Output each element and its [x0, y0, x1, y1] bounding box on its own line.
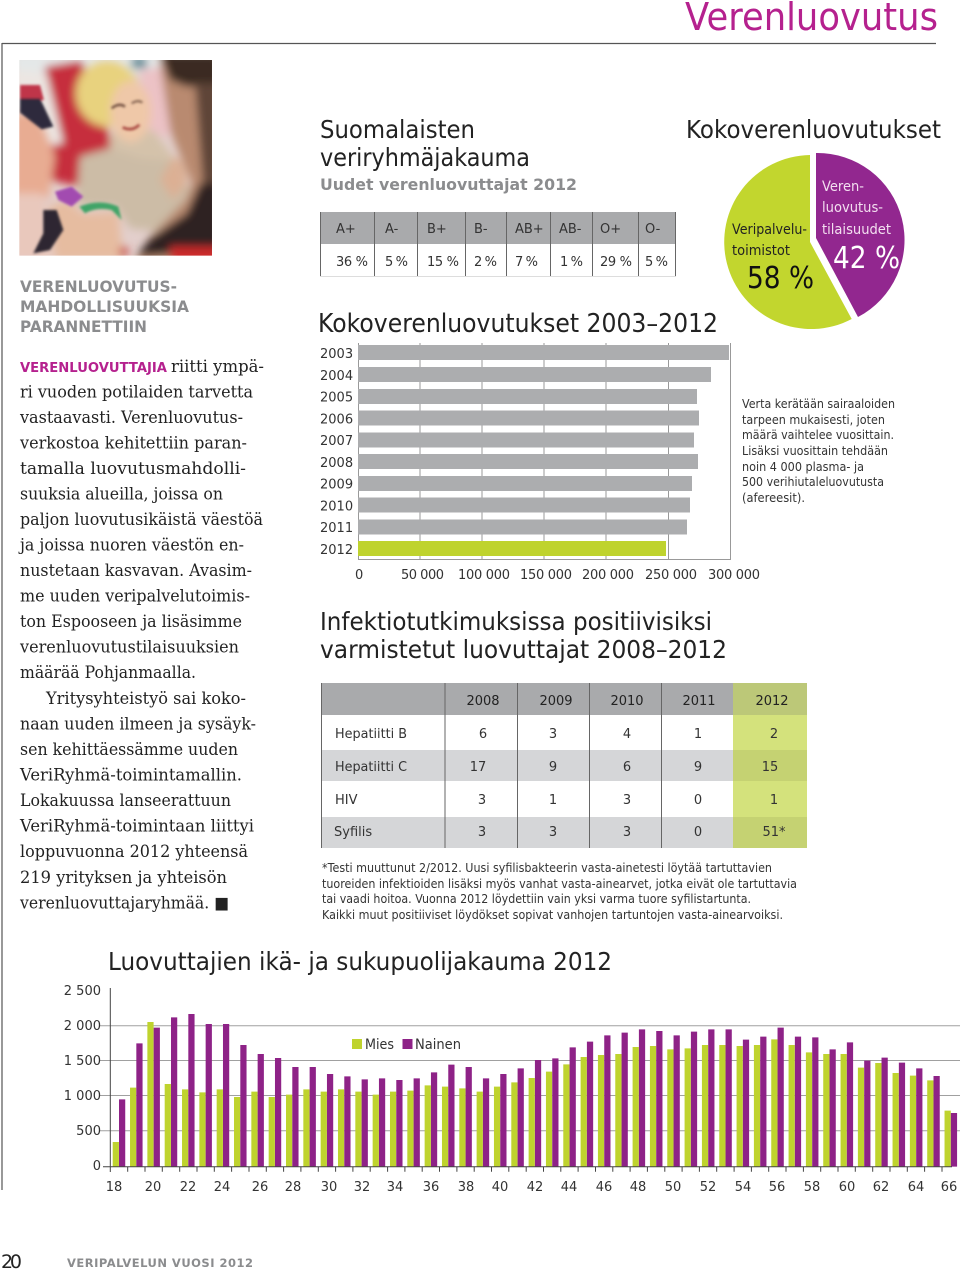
x axis labels: 64 — [908, 1180, 924, 1195]
y axis labels: 1 000 — [64, 1089, 101, 1104]
pie chart — [724, 153, 905, 329]
infection heading: Infektiotutkimuksissa positiivisiksi — [320, 607, 712, 636]
pie chart: toimistot — [732, 243, 790, 259]
bar chart heading: Kokoverenluovutukset 2003–2012 — [318, 309, 718, 339]
blood group heading: Suomalaisten — [320, 115, 475, 144]
side note: Lisäksi vuosittain tehdään — [742, 444, 888, 458]
infection table: 2009 — [539, 694, 573, 709]
legend — [352, 1037, 461, 1053]
footnote — [322, 861, 797, 922]
footer: VERIPALVELUN VUOSI 2012 — [67, 1256, 253, 1270]
bar chart: donations by year: 100 000 — [458, 568, 510, 583]
x axis labels: 20 — [145, 1180, 161, 1195]
x axis labels: 42 — [527, 1180, 543, 1195]
side note — [742, 397, 895, 505]
x axis labels: 44 — [561, 1180, 577, 1195]
blood group table: 36 % — [336, 255, 368, 270]
body text: ja joissa nuoren väestön en- — [18, 536, 244, 554]
infection table: 2011 — [682, 694, 716, 709]
photo: blood donor — [19, 60, 212, 256]
men bars — [113, 1022, 951, 1167]
infection table: Hepatiitti C — [335, 760, 407, 775]
body text: verenluovutustilaisuuksien — [19, 638, 239, 656]
x axis labels: 36 — [423, 1180, 439, 1195]
bar chart: donations by year: 50 000 — [401, 568, 444, 583]
body text: Lokakuussa lanseerattuun — [20, 791, 231, 810]
side note: noin 4 000 plasma- ja — [742, 460, 864, 474]
body text: sen kehittäessämme uuden — [20, 740, 238, 759]
x axis labels: 22 — [180, 1180, 196, 1195]
body text: määrää Pohjanmaalla. — [20, 663, 196, 682]
body text: nustetaan kasvavan. Avasim- — [20, 561, 252, 580]
bar chart: donations by year: 2007 — [320, 434, 353, 449]
body text: loppuvuonna 2012 yhteensä — [20, 842, 248, 861]
age chart heading: Luovuttajien ikä- ja sukupuolijakauma 2012 — [108, 947, 612, 976]
bar chart: donations by year: 150 000 — [520, 568, 572, 583]
bar chart: donations by year: 2012 — [320, 543, 353, 558]
infection table: 9 — [549, 760, 557, 775]
left heading: PARANNETTIIN — [20, 317, 147, 336]
x axis labels: 62 — [873, 1180, 889, 1195]
body text: ton Espooseen ja lisäsimme — [20, 612, 242, 631]
side note: tarpeen mukaisesti, joten — [742, 413, 885, 427]
body text: me uuden veripalvelutoimis- — [20, 586, 250, 606]
infection table: 1 — [549, 793, 557, 808]
footer — [1, 1251, 253, 1270]
x axis labels: 54 — [735, 1180, 751, 1195]
infection table: Syfilis — [334, 825, 372, 840]
body text: Yritysyhteistyö sai koko- — [45, 689, 246, 708]
infection table: 0 — [694, 825, 702, 840]
body text: 219 yrityksen ja yhteisön — [20, 868, 227, 887]
pie chart: Veripalvelu- — [732, 222, 807, 238]
blood group heading — [320, 115, 577, 194]
x axis labels: 50 — [665, 1180, 681, 1195]
x axis labels: 30 — [321, 1180, 337, 1195]
bar chart: donations by year: 2006 — [320, 412, 353, 428]
left heading: VERENLUOVUTUS- — [20, 277, 177, 296]
infection table: Hepatiitti B — [335, 727, 407, 742]
blood group heading: Uudet verenluovuttajat 2012 — [320, 175, 577, 194]
x axis labels: 32 — [354, 1180, 370, 1195]
y axis labels — [64, 984, 101, 1174]
bar chart: donations by year: 250 000 — [645, 568, 697, 583]
side note: määrä vaihtelee vuosittain. — [742, 428, 894, 442]
body text: riitti ympä- — [171, 357, 264, 376]
axes — [103, 988, 952, 1172]
bar chart: donations by year: 2011 — [320, 521, 353, 536]
footnote: *Testi muuttunut 2/2012. Uusi syfilisbakteerin vasta-ainetesti löytää tartuttavien — [322, 861, 772, 875]
infection heading — [320, 607, 727, 664]
footnote: tai vaadi hoitoa. Vuonna 2012 löydettiin vain yksi varma tuore syfilistartunta. — [322, 892, 751, 906]
y axis labels: 1 500 — [64, 1054, 101, 1069]
infection heading: varmistetut luovuttajat 2008–2012 — [320, 635, 727, 664]
infection table: 0 — [694, 793, 702, 808]
bar chart: donations by year: 2005 — [320, 390, 353, 406]
x axis labels — [106, 1180, 957, 1195]
blood group table: O+ — [600, 222, 621, 237]
infection table: 4 — [623, 727, 631, 742]
blood group table: 5 % — [645, 255, 668, 270]
bar chart: donations by year: 2010 — [320, 500, 353, 514]
body text: suuksia alueilla, joissa on — [20, 484, 223, 504]
legend: Mies — [365, 1037, 394, 1053]
x axis labels: 34 — [387, 1180, 403, 1195]
x axis labels: 48 — [630, 1180, 646, 1195]
infection table: 2008 — [466, 694, 500, 709]
body text: naan uuden ilmeen ja sysäyk- — [20, 714, 256, 734]
body text — [18, 357, 264, 912]
y axis labels: 2 000 — [64, 1019, 101, 1034]
infection table: 3 — [623, 793, 631, 808]
blood group heading: veriryhmäjakauma — [320, 143, 530, 172]
blood group table: 29 % — [600, 255, 632, 270]
infection table: 15 — [762, 760, 778, 775]
infection table: 1 — [770, 793, 778, 808]
y axis labels: 2 500 — [64, 984, 101, 999]
infection table: 3 — [478, 793, 486, 808]
body text: vastaavasti. Verenluovutus- — [19, 408, 243, 427]
bar chart: donations by year: 0 — [355, 568, 363, 583]
blood group table: 5 % — [385, 255, 408, 270]
pie chart: 42 % — [833, 241, 900, 276]
legend: Nainen — [415, 1037, 461, 1053]
x axis labels: 40 — [492, 1180, 508, 1195]
bar chart: donations by year — [320, 343, 760, 583]
blood group table: A- — [385, 222, 399, 237]
pie chart: 58 % — [747, 261, 814, 296]
infection table: 3 — [549, 727, 557, 742]
x axis labels: 28 — [285, 1180, 301, 1195]
infection table: 17 — [470, 760, 486, 775]
infection table — [321, 683, 807, 848]
infection table: 6 — [623, 760, 631, 775]
blood group table — [320, 212, 676, 276]
blood group table: 7 % — [515, 255, 538, 270]
blood group table: AB- — [559, 222, 582, 237]
body text: verkostoa kehitettiin paran- — [19, 434, 247, 452]
blood group table: O- — [645, 222, 661, 237]
body text: paljon luovutusikäistä väestöä — [20, 510, 263, 529]
infection table: 6 — [479, 727, 487, 742]
bar chart: donations by year: 300 000 — [708, 568, 760, 583]
x axis labels: 26 — [252, 1180, 268, 1195]
infection table: HIV — [335, 793, 358, 808]
bar chart: donations by year: 2003 — [320, 347, 353, 362]
bar chart: donations by year: 2008 — [320, 456, 353, 471]
infection table: 1 — [694, 727, 702, 742]
blood group table: 1 % — [560, 255, 583, 270]
x axis labels: 56 — [769, 1180, 785, 1195]
pie heading: Kokoverenluovutukset — [686, 115, 941, 144]
age and gender bar chart — [64, 984, 960, 1195]
x axis labels: 24 — [214, 1180, 230, 1195]
x axis labels: 66 — [941, 1180, 957, 1195]
side note: Verta kerätään sairaaloiden — [742, 397, 895, 411]
footnote: Kaikki muut positiiviset löydökset sopivat vanhojen tartuntojen vasta-ainearvoiksi. — [322, 908, 783, 922]
pie chart: tilaisuudet — [822, 222, 891, 238]
infection table: 2010 — [610, 694, 644, 709]
body text: VERENLUOVUTTAJIA — [20, 360, 168, 376]
y axis labels: 500 — [76, 1124, 101, 1139]
infection table: 3 — [623, 825, 631, 840]
infection table: 2012 — [755, 694, 789, 709]
y axis labels: 0 — [93, 1159, 101, 1174]
x axis labels: 18 — [106, 1180, 122, 1195]
blood group table: B- — [474, 222, 488, 237]
infection table: 9 — [694, 760, 702, 775]
body text: verenluovuttajaryhmää. ■ — [19, 894, 229, 912]
x axis labels: 60 — [839, 1180, 855, 1195]
side note: (afereesit). — [742, 491, 805, 505]
bar chart: donations by year: 2009 — [320, 478, 353, 492]
blood group table: B+ — [427, 222, 447, 237]
body text: tamalla luovutusmahdolli- — [20, 459, 246, 478]
body text: VeriRyhmä-toimintaan liittyi — [19, 816, 254, 836]
infection table: 51* — [762, 825, 786, 840]
body text: VeriRyhmä-toimintamallin. — [19, 766, 242, 784]
side note: 500 verihiutaleluovutusta — [742, 475, 884, 489]
blood group table: 2 % — [474, 255, 497, 270]
infection table: 3 — [478, 825, 486, 840]
left heading: MAHDOLLISUUKSIA — [20, 297, 190, 316]
pie chart: Veren- — [822, 179, 864, 195]
blood group table: 15 % — [427, 255, 459, 270]
left heading — [20, 277, 190, 336]
x axis labels: 58 — [804, 1180, 820, 1195]
infection table: 3 — [549, 825, 557, 840]
blood group table: A+ — [336, 222, 356, 237]
footnote: tuoreiden infektioiden lisäksi myös vanhat vasta-ainearvet, jotka eivät ole tartuttavia — [322, 877, 797, 891]
pie chart: luovutus- — [822, 200, 883, 216]
x axis labels: 52 — [700, 1180, 716, 1195]
bar chart: donations by year: 200 000 — [582, 568, 634, 583]
bar chart: donations by year: 2004 — [320, 369, 353, 384]
infection table: 2 — [770, 727, 778, 742]
blood group table: AB+ — [515, 222, 544, 237]
x axis labels: 38 — [458, 1180, 474, 1195]
x axis labels: 46 — [596, 1180, 612, 1195]
women bars — [119, 1014, 957, 1167]
body text: ri vuoden potilaiden tarvetta — [20, 382, 253, 402]
